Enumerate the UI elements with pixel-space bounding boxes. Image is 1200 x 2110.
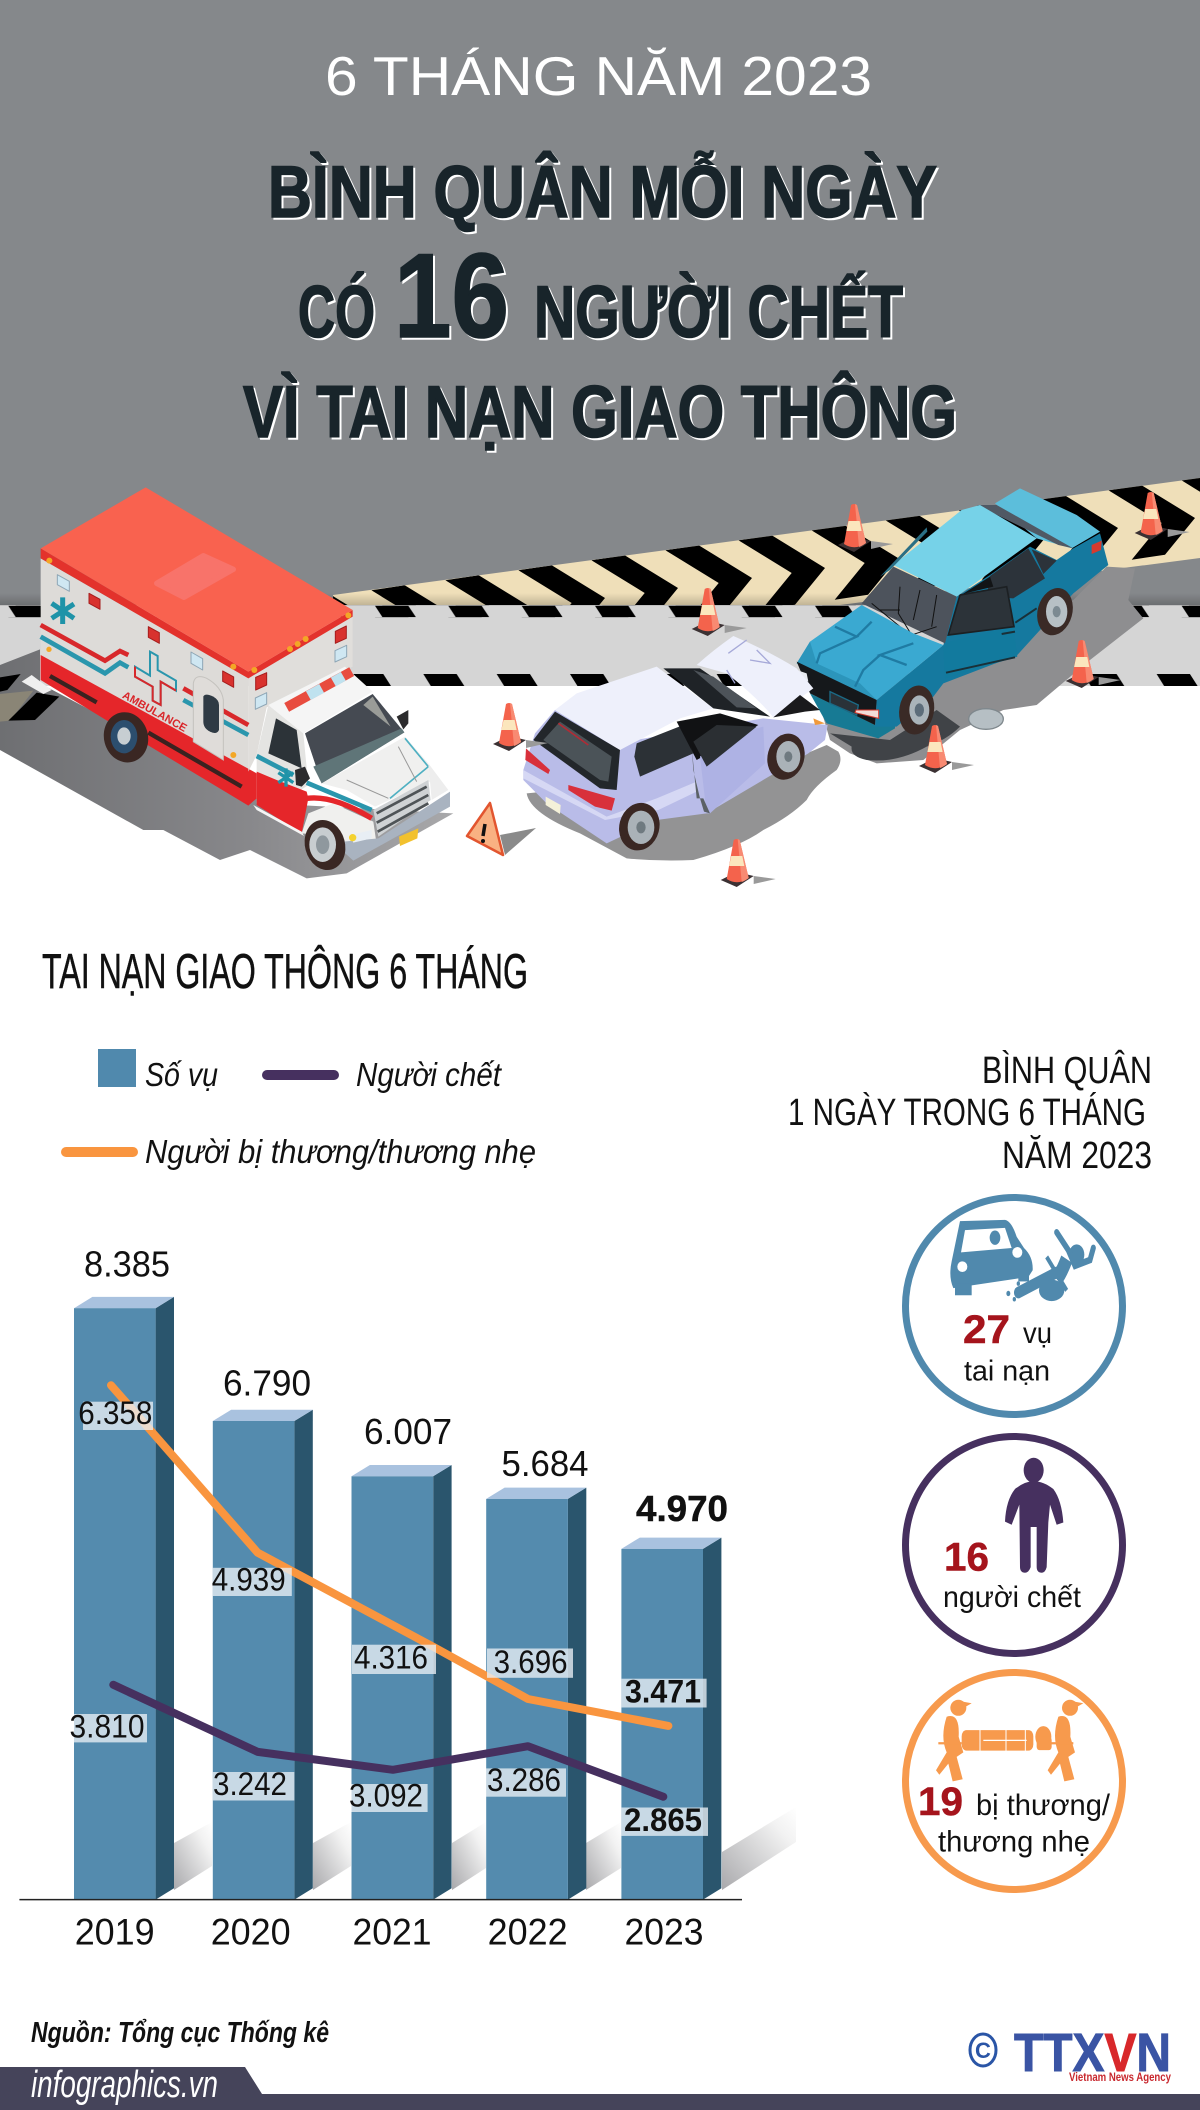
rear door — [193, 677, 223, 760]
case totals: 8.385 — [84, 1244, 170, 1285]
injured values: 3.696 — [494, 1644, 568, 1680]
icon: traffic cone 7 — [919, 725, 974, 773]
death values: 2.865 — [624, 1802, 702, 1838]
legend: deaths: Người chết — [356, 1056, 503, 1093]
year axis labels: 2020 — [211, 1911, 291, 1952]
loose hubcap — [969, 709, 1003, 729]
case totals: 5.684 — [502, 1443, 588, 1484]
icon: traffic cone 1 — [692, 588, 747, 636]
bar 2020 — [213, 1410, 313, 1900]
injured values: 4.939 — [212, 1562, 286, 1598]
agency logo — [970, 2023, 1171, 2084]
title: main three lines: 16 — [394, 229, 509, 363]
wheel: blue car front — [895, 683, 938, 737]
legend: injured: Người bị thương/thương nhẹ — [145, 1133, 536, 1170]
number: 19 — [918, 1780, 963, 1824]
caption line 1: bị thương/ — [976, 1789, 1111, 1822]
line: deaths — [113, 1685, 663, 1797]
case totals: 4.970 — [636, 1488, 728, 1529]
icon: car hitting motorbike — [950, 1220, 1093, 1302]
caption: người chết — [943, 1581, 1082, 1614]
cross emblem — [135, 652, 176, 705]
icon: traffic cone 6 — [1066, 640, 1121, 688]
heading: daily average: BÌNH QUÂN — [982, 1049, 1152, 1092]
injured values: 6.358 — [78, 1395, 152, 1431]
icon: traffic cone 4 — [838, 504, 893, 552]
death values: 3.242 — [213, 1766, 287, 1802]
icon: traffic cone 2 — [493, 703, 548, 751]
tagline: Vietnam News Agency — [1069, 2070, 1171, 2084]
heading: daily average — [788, 1049, 1152, 1177]
bar 2021 — [352, 1465, 452, 1900]
panel: 27 accidents per day — [906, 1198, 1122, 1414]
title: main three lines: CÓ — [298, 272, 375, 353]
injured values — [78, 1395, 701, 1709]
icon: warning triangle — [467, 803, 536, 855]
AMBULANCE lettering: AMBULANCE — [120, 689, 189, 735]
star of life — [52, 597, 74, 624]
wheel: blue car rear — [1032, 584, 1078, 639]
windshield — [305, 694, 404, 783]
title: main three lines: BÌNH QUÂN MỖI NGÀY — [268, 151, 937, 233]
injured values: 4.316 — [354, 1639, 428, 1675]
icon: traffic cone 3 — [721, 839, 776, 887]
ground shadows of vehicles — [0, 567, 1143, 878]
copyright mark — [970, 2034, 996, 2066]
heading: chart section: TAI NẠN GIAO THÔNG 6 THÁNG — [42, 945, 528, 999]
copyright mark: C — [975, 2038, 991, 2063]
wheel: ambulance front — [299, 815, 351, 875]
caption line 2: thương nhẹ — [938, 1826, 1090, 1858]
year axis labels: 2019 — [75, 1911, 155, 1952]
panel: 19 injured per day — [906, 1672, 1122, 1890]
illustration: blue crashed car — [797, 488, 1108, 738]
illustration: white crashed hatchback — [523, 636, 828, 855]
side stripes — [41, 625, 248, 735]
title: period line: 6 THÁNG NĂM 2023 — [325, 45, 872, 107]
death values: 3.286 — [487, 1762, 561, 1798]
soft shading along road edge — [0, 593, 1200, 606]
icon: person — [1005, 1458, 1063, 1573]
TTXVN wordmark: TTXVN — [1014, 2023, 1171, 2083]
year axis labels: 2021 — [352, 1911, 432, 1952]
bar shadows — [174, 1807, 796, 1890]
hood and front — [322, 737, 430, 807]
chevron barrier strip — [333, 478, 1200, 605]
death values: 3.810 — [70, 1709, 144, 1745]
case totals — [84, 1244, 728, 1529]
icon: traffic cone 5 — [1135, 492, 1190, 540]
death values: 3.092 — [349, 1778, 423, 1814]
wheel: ambulance rear — [98, 707, 154, 767]
year axis labels — [75, 1911, 703, 1952]
wheel: hatchback front — [762, 729, 810, 784]
source note: Nguồn: Tổng cục Thống kê — [31, 2017, 329, 2049]
footer site name: infographics.vn — [31, 2064, 218, 2106]
year axis labels: 2023 — [624, 1911, 704, 1952]
cab — [257, 705, 308, 833]
case totals: 6.790 — [223, 1363, 311, 1404]
value label boxes — [74, 1402, 708, 1836]
year axis labels: 2022 — [488, 1911, 568, 1952]
bar 2023 — [621, 1538, 721, 1900]
number: 27 — [963, 1308, 1010, 1352]
number: 16 — [944, 1536, 989, 1580]
bar 2022 — [486, 1488, 586, 1900]
light bar — [287, 672, 352, 707]
panel: 16 deaths per day — [906, 1436, 1122, 1654]
legend: cases — [98, 1049, 218, 1093]
illustration: ambulance — [22, 487, 450, 875]
wheel: hatchback rear — [614, 798, 665, 855]
chart legend — [66, 1049, 536, 1170]
unit: vụ — [1023, 1317, 1052, 1350]
bar 2019 — [74, 1297, 174, 1900]
death values — [70, 1709, 702, 1838]
case totals: 6.007 — [364, 1411, 452, 1452]
road band — [0, 605, 1200, 686]
title: main three lines: VÌ TAI NẠN GIAO THÔNG — [243, 372, 957, 453]
line: injured — [111, 1385, 668, 1726]
title: main three lines: NGƯỜI CHẾT — [534, 272, 903, 353]
footer bar — [0, 2064, 1200, 2110]
legend: cases: Số vụ — [145, 1056, 218, 1093]
icon: stretcher carriers — [936, 1700, 1083, 1781]
caption: tai nạn — [964, 1356, 1050, 1388]
title: main three lines — [243, 151, 957, 453]
panel: grey header background — [0, 0, 1200, 606]
injured values: 3.471 — [625, 1673, 701, 1709]
heading: daily average: NĂM 2023 — [1002, 1134, 1152, 1177]
bar and line chart — [19, 1244, 796, 1952]
title block — [243, 45, 957, 453]
marker lights — [89, 593, 346, 690]
